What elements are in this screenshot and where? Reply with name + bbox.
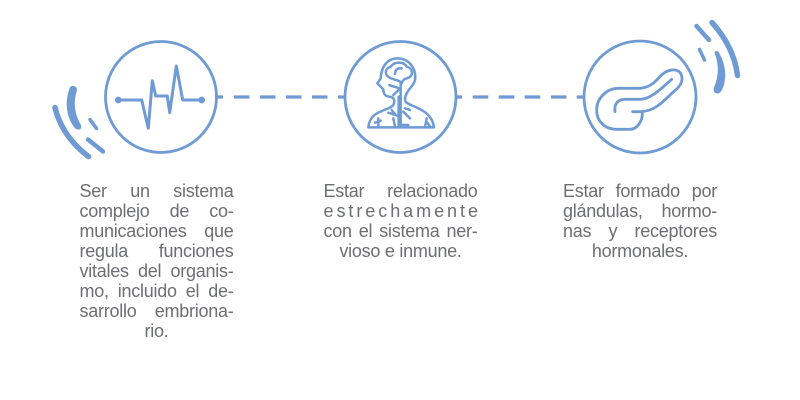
text block: third column [563,181,717,261]
decorative sound waves: left [55,86,103,156]
text block: first column: municaciones que [80,221,234,241]
text block: third column: glándulas, hormo- [563,201,717,221]
text block: second column: Estar relacionado [324,181,478,201]
decorative sound waves: right [696,22,738,94]
text block: third column: nas y receptores [563,221,717,241]
text block: first column: Ser un sistema [80,181,234,201]
text block: second column: con el sistema ner- [324,221,478,241]
icon: pancreas in circle [584,41,696,153]
text block: first column [80,181,234,341]
text block: first column: complejo de co- [80,201,234,221]
text block: first column: vitales del organis- [80,261,234,281]
text block: third column: Estar formado por [563,181,717,201]
text block: second column: estrechamente [324,201,481,221]
text block: second column: vioso e inmune. [339,241,462,261]
text block: first column: mo, incluido el de- [80,281,234,301]
text block: first column: sarrollo embriona- [80,301,234,321]
text block: first column: rio. [144,321,168,341]
text block: first column: regula funciones [80,241,234,261]
text block: second column [324,181,481,261]
icon: heartbeat in circle [106,42,216,152]
icon: head with brain and nerves in circle [345,42,456,152]
text block: third column: hormonales. [592,241,688,261]
dashed connector: first to second circle [217,95,344,99]
dashed connector: second to third circle [457,95,583,99]
